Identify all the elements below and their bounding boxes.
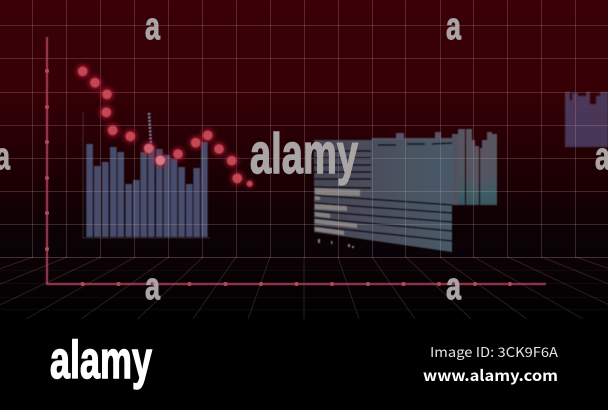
axis ticks [45, 69, 512, 286]
front slanted row chart [313, 140, 452, 252]
center watermark: alamy [250, 122, 358, 186]
dot cores [78, 66, 253, 187]
watermark letters: a [446, 266, 462, 308]
floor [0, 258, 608, 320]
watermark letters: a [145, 6, 161, 48]
wall grid [0, 0, 608, 258]
hatched spike [149, 113, 151, 145]
website url: www.alamy.com [423, 365, 558, 386]
dark row separators [313, 143, 452, 241]
small tick marks under rows [318, 239, 354, 248]
grey row highlights [315, 188, 360, 235]
floor grid [0, 257, 608, 319]
image id: Image ID: 3CK9F6A [430, 341, 559, 361]
chart axes [45, 37, 546, 286]
bottom black bar [0, 319, 608, 410]
back bar chart [372, 129, 497, 205]
watermark letters [0, 6, 608, 308]
far right bar chart [565, 92, 608, 147]
dot glows [76, 64, 254, 188]
left bar chart [83, 112, 210, 238]
watermark letters: a [446, 6, 462, 48]
red dotted line chart [76, 64, 254, 188]
background [0, 0, 608, 258]
alamy logo: alamy [50, 331, 152, 390]
watermark letters: a [145, 266, 161, 308]
